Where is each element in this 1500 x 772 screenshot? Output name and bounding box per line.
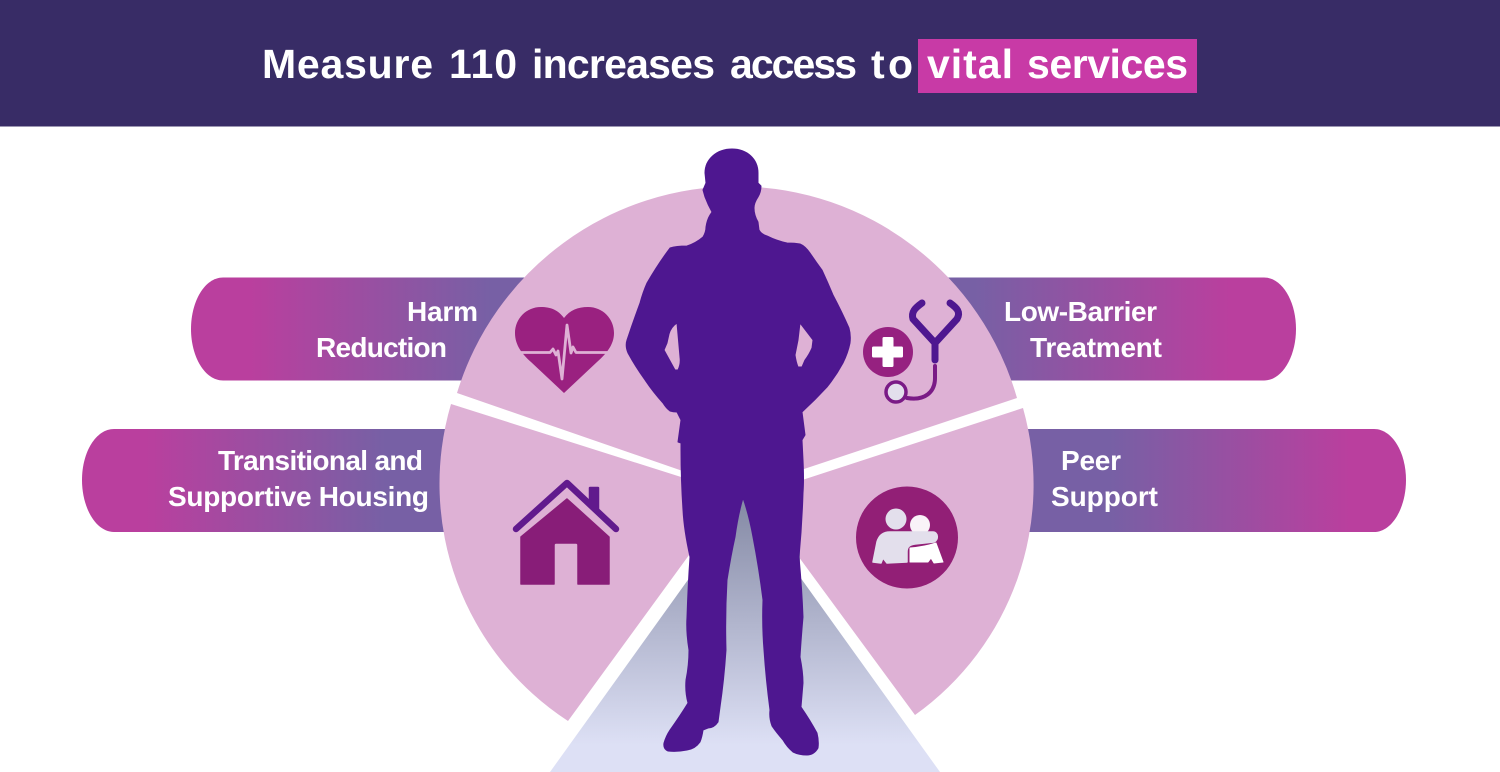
pill: transitional and supportive housing [82,429,500,532]
title: 110 [449,41,517,87]
title: access [730,41,857,87]
label: peer support [1051,445,1158,512]
label: peer support: Support [1051,481,1158,512]
sector: lower left [439,404,700,721]
title: services [1027,41,1188,87]
label: low-barrier treatment: Treatment [1030,332,1162,363]
title: vital [927,41,1013,87]
label: peer support: Peer [1061,445,1121,476]
label: low-barrier treatment: Low-Barrier [1004,296,1157,327]
header banner [0,0,1500,126]
path fan below figure [550,495,940,772]
pill: peer support [1000,429,1406,532]
icon: heart with pulse [515,307,614,393]
title highlight [918,39,1197,93]
label: transitional and supportive housing: Supportive Housing [168,481,429,512]
title: Measure [262,41,433,87]
title: increases [532,41,715,87]
label: low-barrier treatment [1004,296,1162,363]
sector: lower right [790,408,1034,715]
title [262,41,1188,87]
label: transitional and supportive housing: Transitional and [218,445,423,476]
title: to [871,41,913,87]
label: harm reduction [316,296,478,363]
icon: stethoscope with medical cross [863,303,959,402]
icon: peer support [856,486,958,588]
sector: top [457,186,1017,477]
pill: harm reduction [191,278,560,380]
pill: low-barrier treatment [930,278,1296,380]
label: transitional and supportive housing [168,445,429,512]
person silhouette [626,149,850,755]
icon: house [516,483,616,584]
label: harm reduction: Reduction [316,332,447,363]
label: harm reduction: Harm [407,296,478,327]
